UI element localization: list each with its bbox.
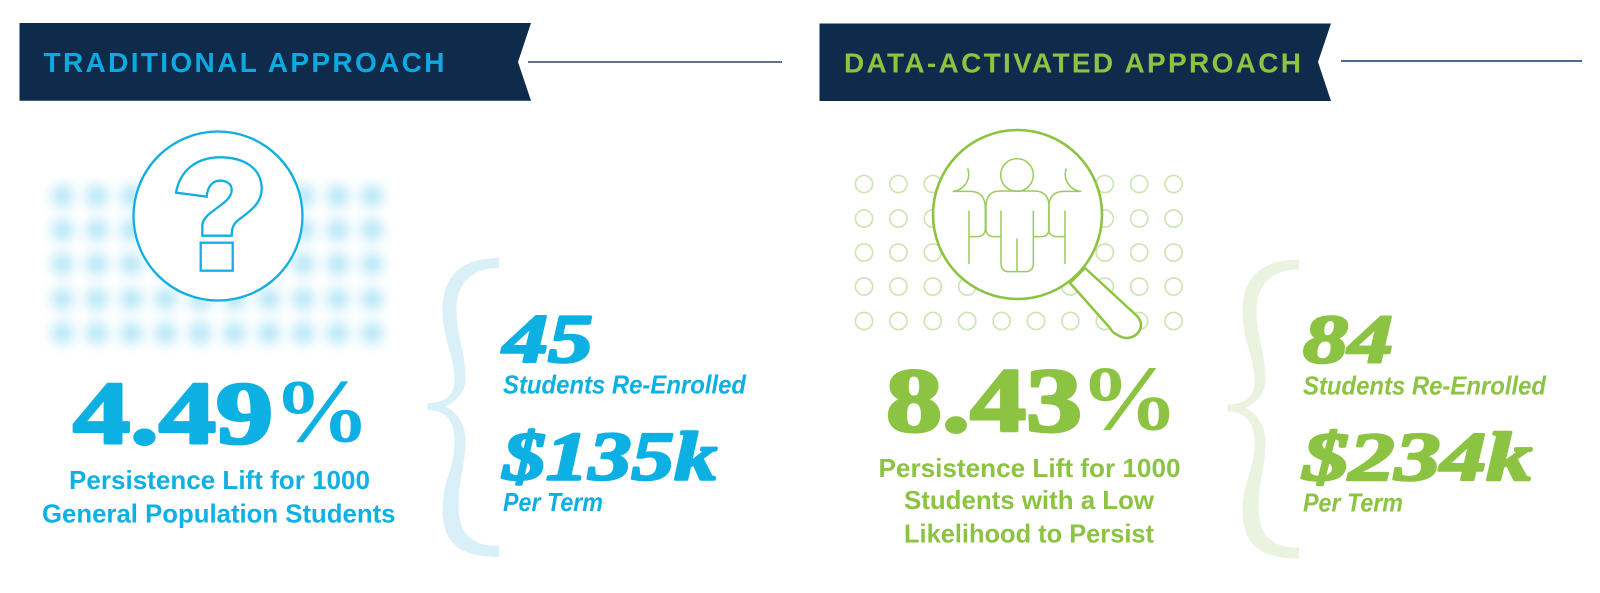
stat: 84 students re-enrolled — [1303, 302, 1547, 400]
description: general population: General Population Students — [42, 498, 396, 528]
stat: 45 students re-enrolled: 45 — [500, 301, 593, 377]
stat: $135k per term: Per Term — [503, 487, 603, 517]
description: low likelihood students: Persistence Lift for 1000 — [878, 453, 1180, 483]
stat: 8.43%: % — [1080, 348, 1178, 450]
banner: traditional approach — [20, 23, 531, 101]
outlined dot grid — [855, 175, 1182, 330]
icon: magnifying glass over people — [933, 130, 1141, 338]
banner: traditional approach: TRADITIONAL APPROACH — [44, 47, 444, 78]
icon: question mark in circle — [134, 132, 302, 300]
blurred dot grid — [52, 185, 383, 344]
stat: 4.49%: 4.49 — [73, 365, 273, 463]
description: low likelihood students — [878, 453, 1180, 548]
stat: 45 students re-enrolled — [500, 301, 747, 400]
brace — [1228, 260, 1299, 558]
description: general population: Persistence Lift for 1000 — [69, 465, 370, 495]
stat: $234k per term: $234k — [1302, 419, 1532, 495]
description: low likelihood students: Students with a Low — [904, 485, 1155, 515]
stat: $135k per term: $135k — [502, 418, 717, 494]
description: general population — [42, 465, 396, 528]
brace — [428, 258, 499, 557]
stat: 84 students re-enrolled: 84 — [1303, 302, 1393, 378]
description: low likelihood students: Likelihood to Persist — [904, 518, 1154, 548]
stat: 4.49%: % — [273, 362, 370, 462]
panel: traditional approach — [20, 23, 782, 557]
banner: data-activated approach: DATA-ACTIVATED APPROACH — [844, 48, 1301, 78]
stat: $234k per term: Per Term — [1303, 488, 1403, 518]
banner: data-activated approach — [820, 24, 1331, 101]
stat: 45 students re-enrolled: Students Re-Enrolled — [503, 370, 747, 400]
stat: $135k per term — [502, 418, 717, 517]
panel: data-activated approach — [820, 24, 1582, 558]
stat: 8.43%: 8.43 — [886, 350, 1082, 451]
stat: 84 students re-enrolled: Students Re-Enrolled — [1303, 370, 1547, 400]
stat: $234k per term — [1302, 419, 1532, 518]
